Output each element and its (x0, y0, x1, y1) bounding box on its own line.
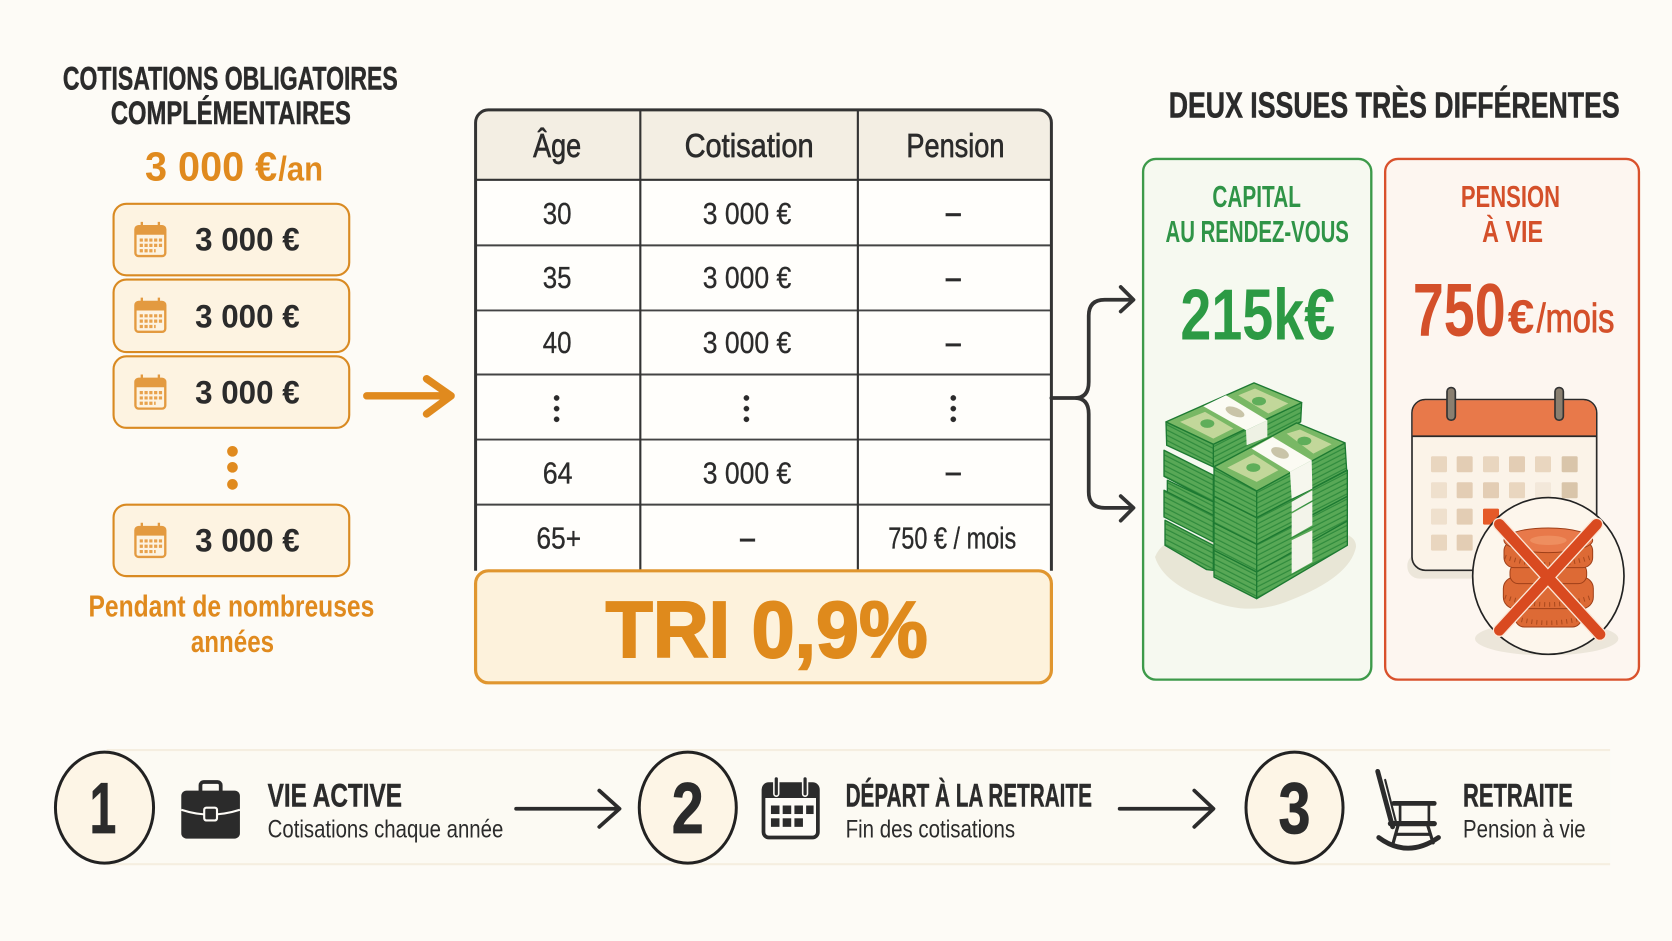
badge 2 (639, 752, 736, 863)
panel title: CAPITAL (1212, 179, 1301, 214)
table header: Cotisation (685, 128, 814, 165)
table rows: 3 000 € (703, 196, 791, 231)
text: vie active: Cotisations chaque année (268, 817, 503, 844)
text: départ à la retraite: Fin des cotisations (846, 817, 1015, 844)
text: départ à la retraite: DÉPART À LA RETRAITE (846, 778, 1092, 814)
yearly contribution card 2 (114, 280, 349, 352)
icon: rocking chair (1378, 771, 1438, 848)
arrow: step 2 to 3 (1120, 791, 1213, 827)
timeline (55, 752, 1586, 863)
panel title: AU RENDEZ-VOUS (1165, 214, 1349, 249)
text: vie active: VIE ACTIVE (268, 778, 402, 814)
panel: pension à vie (1385, 159, 1639, 680)
table rows: 30 (543, 196, 572, 231)
step 2: départ à la retraite (639, 752, 1092, 863)
badge 1 (55, 752, 154, 863)
caption: pendant de nombreuses années (89, 589, 374, 659)
table: age contribution pension (476, 110, 1051, 571)
heading: cotisations obligatoires: COMPLÉMENTAIRES (111, 95, 351, 131)
heading: cotisations obligatoires (63, 61, 398, 131)
table rows: 64 (543, 455, 573, 490)
panel: cotisations (63, 61, 398, 659)
badge 3: 3 (1279, 768, 1311, 849)
amount per year: 3 000 € (145, 143, 277, 189)
arrow: step 1 to 2 (516, 791, 620, 827)
icon: calendar (763, 779, 818, 838)
text: retraite: Pension à vie (1463, 817, 1586, 844)
yearly contribution card 2: 3 000 € (195, 299, 300, 335)
panel: capital au rendez-vous (1143, 159, 1371, 680)
table header (533, 128, 1004, 165)
text: départ à la retraite (846, 778, 1092, 844)
text: retraite (1463, 778, 1586, 844)
yearly contribution card 1: 3 000 € (195, 222, 300, 258)
yearly contribution card 1 (114, 204, 349, 275)
table rows: 750 € / mois (888, 520, 1016, 555)
table rows: 35 (543, 260, 572, 295)
panel title: À VIE (1482, 214, 1543, 249)
amount per year: /an (278, 150, 323, 188)
value: 750€/mois: /mois (1537, 295, 1614, 341)
table header: Âge (533, 128, 581, 165)
table rows: 40 (543, 325, 572, 360)
value: 750€/mois: 750 (1413, 268, 1506, 352)
yearly contribution card 4 (114, 505, 349, 576)
icon: stacks of banknotes (1155, 383, 1356, 609)
icon: calendar with crossed-out coins (1407, 388, 1624, 655)
table rows: 3 000 € (703, 455, 791, 490)
step 1: vie active (55, 752, 503, 863)
badge 1: 1 (90, 768, 116, 849)
callout: TRI 0,9%: TRI 0,9% (606, 585, 928, 674)
callout: TRI 0,9% (476, 571, 1051, 683)
value: 750€/mois: € (1508, 291, 1534, 343)
icon: briefcase (181, 782, 240, 839)
table rows: 65+ (536, 520, 581, 555)
yearly contribution card 3: 3 000 € (195, 374, 300, 410)
yearly contribution card 4: 3 000 € (195, 523, 300, 559)
table rows: 3 000 € (703, 260, 791, 295)
arrow: branching to two outcomes (1051, 287, 1134, 521)
step 3: retraite (1246, 752, 1586, 863)
table header: Pension (906, 128, 1004, 165)
badge 3 (1246, 752, 1343, 863)
text: vie active (268, 778, 503, 844)
yearly contribution card 3 (114, 356, 349, 428)
value: 215k€: 215k€ (1180, 274, 1335, 355)
table rows (536, 196, 1016, 555)
badge 2: 2 (672, 768, 704, 849)
panel title: PENSION (1461, 179, 1560, 214)
text: retraite: RETRAITE (1463, 778, 1573, 814)
panel title (1461, 179, 1560, 249)
panel title (1165, 179, 1349, 249)
table rows: 3 000 € (703, 325, 791, 360)
caption: pendant de nombreuses années: Pendant de nombreuses (89, 589, 374, 624)
value: 750€/mois (1413, 268, 1614, 352)
caption: pendant de nombreuses années: années (191, 624, 274, 659)
arrow: contributions to table (367, 379, 451, 414)
ellipsis dots (227, 446, 238, 490)
heading: cotisations obligatoires: COTISATIONS OBLIGATOIRES (63, 61, 398, 97)
